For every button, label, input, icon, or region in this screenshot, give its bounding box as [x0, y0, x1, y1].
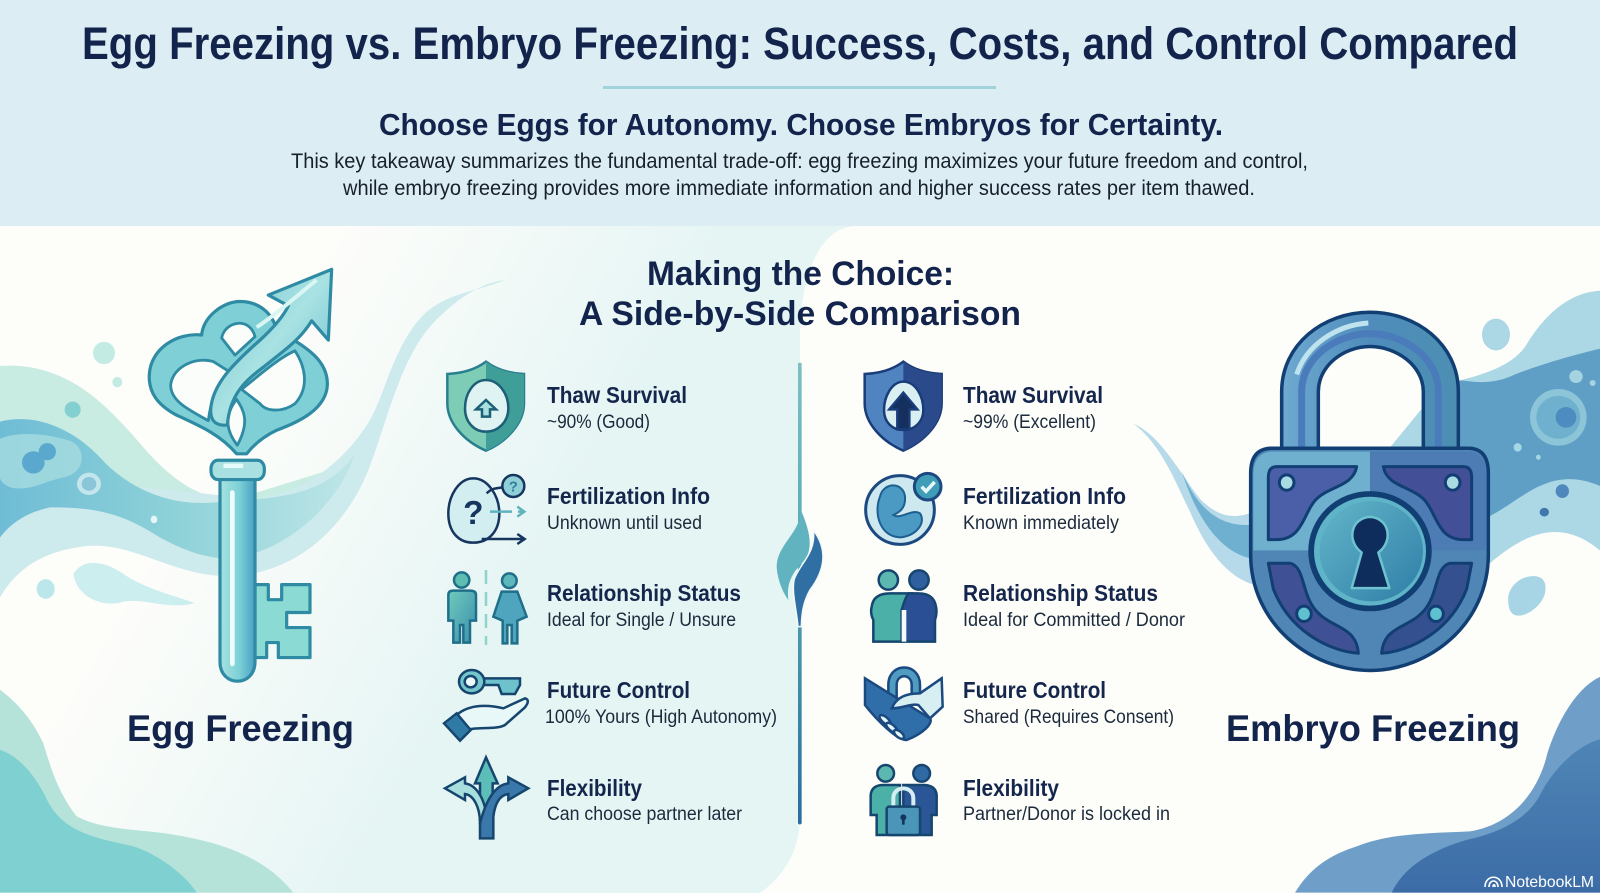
heading: Thaw Survival — [963, 382, 1103, 408]
takeaway body line 1: This key takeaway summarizes the fundamental trade-off: egg freezing maximizes your future freedom and control, — [291, 150, 1308, 173]
value: Ideal for Committed / Donor — [963, 610, 1186, 631]
icon: egg with question mark: ? — [509, 479, 518, 495]
icon: branching arrows — [445, 757, 528, 838]
heading: Fertilization Info — [547, 483, 710, 509]
heading: Future Control — [963, 677, 1106, 703]
label: Embryo Freezing: Embryo Freezing — [1226, 708, 1520, 749]
title divider — [603, 86, 996, 89]
value: Shared (Requires Consent) — [963, 707, 1174, 728]
icon: embryo with check badge — [866, 473, 941, 544]
value: Partner/Donor is locked in — [963, 804, 1170, 825]
row: relationship status, egg — [448, 570, 741, 645]
row: future control, egg — [444, 670, 777, 741]
right decorative waves — [1133, 291, 1600, 893]
value: Known immediately — [963, 513, 1119, 534]
icon: couple embracing — [871, 570, 936, 642]
row: flexibility, embryo — [871, 765, 1170, 835]
section heading: Making the Choice: — [647, 255, 954, 293]
comparison column: embryo freezing — [865, 362, 1186, 835]
icon: shield with egg — [447, 362, 524, 451]
heading: Future Control — [547, 677, 690, 703]
icon: couple with padlock — [871, 765, 937, 835]
heading: Relationship Status — [547, 580, 741, 606]
value: 100% Yours (High Autonomy) — [545, 707, 777, 728]
heading: Flexibility — [547, 775, 642, 801]
watermark: NotebookLM: NotebookLM — [1505, 874, 1594, 891]
row: fertilization info, egg — [448, 475, 710, 544]
icon: padlock — [1251, 312, 1488, 670]
label: Egg Freezing: Egg Freezing — [127, 708, 354, 749]
icon: key above open hand — [444, 670, 528, 741]
icon: key with arrow — [149, 269, 332, 681]
row: relationship status, embryo — [871, 570, 1186, 642]
centre divider with flame — [777, 363, 823, 824]
icon: egg with question mark: ? — [463, 495, 484, 532]
takeaway body line 2: while embryo freezing provides more immediate information and higher success rates per item thawed. — [342, 177, 1255, 200]
row: thaw survival, embryo — [865, 362, 1103, 451]
row: flexibility, egg — [445, 757, 743, 838]
value: ~90% (Good) — [547, 412, 650, 433]
icon: blue shield with arrow — [865, 362, 942, 451]
section heading — [579, 255, 1021, 333]
heading: Relationship Status — [963, 580, 1158, 606]
icon: man and woman — [448, 570, 527, 645]
row: fertilization info, embryo — [866, 473, 1126, 544]
icon: egg with question mark — [448, 475, 525, 544]
value: Unknown until used — [547, 513, 702, 534]
row: future control, embryo — [865, 667, 1174, 740]
value: Ideal for Single / Unsure — [547, 610, 736, 631]
value: ~99% (Excellent) — [963, 412, 1096, 433]
left decorative waves — [0, 280, 505, 893]
header band — [0, 0, 1600, 226]
comparison column: egg freezing — [444, 362, 777, 838]
icon: handshake with lock — [865, 667, 943, 740]
heading: Fertilization Info — [963, 483, 1126, 509]
section heading: A Side-by-Side Comparison — [579, 295, 1021, 333]
panel: centre left aqua background — [0, 226, 857, 893]
key takeaway heading: Choose Eggs for Autonomy. Choose Embryos for Certainty. — [379, 107, 1223, 142]
heading: Thaw Survival — [547, 382, 687, 408]
row: thaw survival, egg — [447, 362, 687, 451]
heading: Flexibility — [963, 775, 1059, 801]
value: Can choose partner later — [547, 804, 743, 825]
